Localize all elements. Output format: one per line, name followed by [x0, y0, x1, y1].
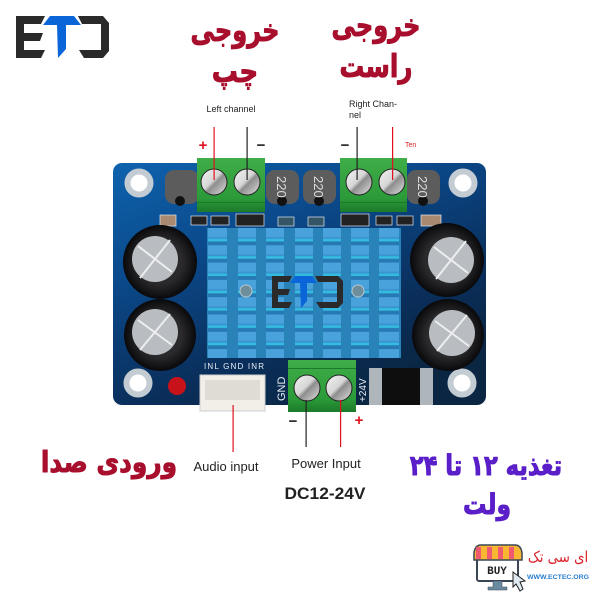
inductors: 220 [311, 176, 326, 198]
arrow: left channel positive wire [214, 127, 215, 180]
heading: right output: راست [340, 48, 412, 85]
LED [168, 377, 186, 395]
silkscreen labels: INL GND INR [204, 362, 264, 371]
arrow: power positive wire [340, 400, 341, 447]
mounting holes [126, 172, 474, 394]
polarity signs: − [257, 137, 266, 154]
inductors: 220 [274, 176, 289, 198]
arrow: right channel positive wire [392, 127, 393, 180]
polarity signs: − [341, 137, 350, 154]
polarity signs [199, 137, 364, 430]
brand text [527, 549, 589, 581]
label: right channel: Right Chan- [349, 99, 397, 109]
arrow: right channel negative wire [356, 127, 358, 180]
left output terminal block [197, 158, 265, 212]
silkscreen labels: GND [276, 376, 288, 401]
label: right channel [349, 99, 397, 120]
arrow: audio input wire [232, 405, 234, 452]
arrow: left channel negative wire [246, 127, 248, 180]
heading: left output: خروجی [191, 12, 279, 49]
panel: amplifier circuit board [113, 158, 486, 412]
icon: shop monitor BUY: BUY [487, 566, 507, 578]
polarity signs: − [289, 413, 298, 430]
electrolytic capacitors [123, 223, 484, 371]
heading: left output [191, 12, 279, 90]
diode D1 [369, 368, 433, 405]
heading: power supply Persian: تغذیه ۱۲ تا ۲۴ [410, 450, 562, 483]
polarity signs: + [199, 137, 208, 154]
heading: right output: خروجی [332, 7, 420, 44]
heading: right output [332, 7, 420, 85]
white audio connector [200, 375, 265, 411]
inductors [165, 170, 440, 206]
heading: power supply Persian [410, 450, 562, 522]
inductors: 220 [415, 176, 430, 198]
brand text: WWW.ECTEC.ORG [527, 574, 589, 581]
logo: ETC top left [16, 16, 109, 58]
label: left channel: Left channel [206, 104, 256, 114]
polarity signs: + [355, 412, 364, 429]
silkscreen labels: +24V [358, 378, 369, 402]
label: right channel: nel [349, 110, 361, 120]
heading: left output: چپ [212, 53, 258, 90]
heading: audio input Persian: ورودی صدا [41, 446, 177, 480]
power terminal block [288, 360, 356, 412]
label: audio input: Audio input [193, 459, 259, 474]
label: power input: Power Input [291, 456, 361, 471]
heatsink [207, 228, 401, 358]
right output terminal block [340, 158, 407, 212]
silkscreen labels [204, 362, 369, 402]
heading: power supply Persian: ولت [463, 489, 511, 522]
icon: shop monitor BUY [474, 545, 525, 591]
arrow: power negative wire [306, 400, 307, 447]
brand text: ای سی تک [528, 549, 588, 566]
SMD components row [160, 214, 441, 226]
board base [113, 163, 486, 405]
logo on heatsink [272, 276, 343, 308]
label: voltage: DC12-24V [284, 484, 366, 503]
label: Ten: Ten [405, 142, 416, 149]
